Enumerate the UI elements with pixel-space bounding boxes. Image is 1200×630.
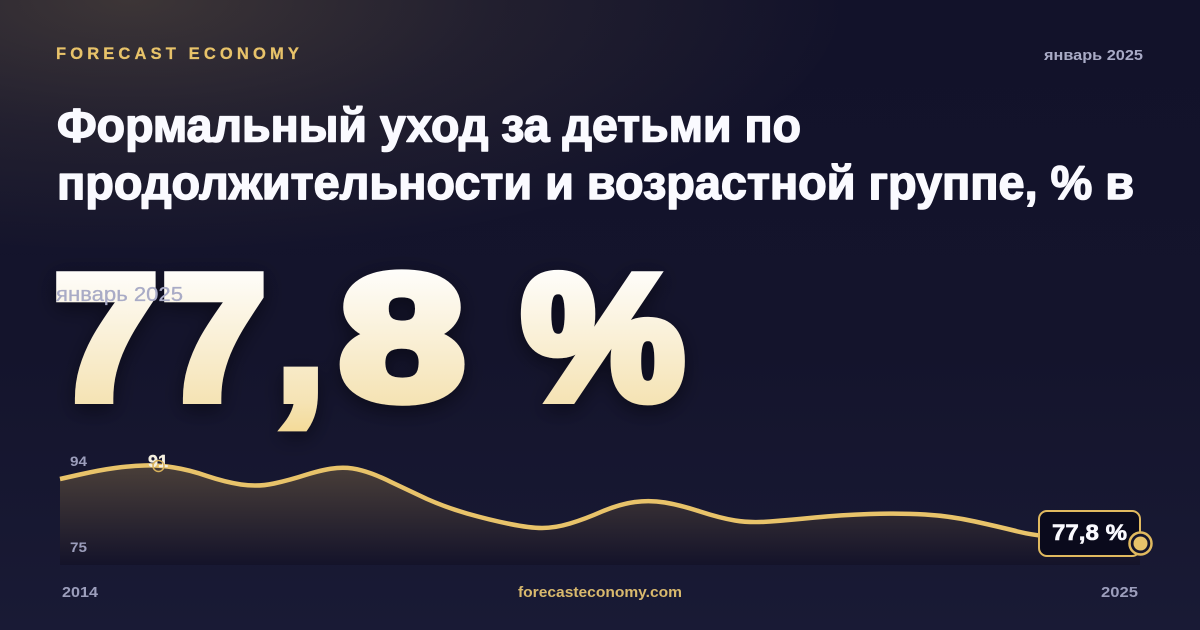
end marker	[1130, 532, 1152, 554]
peak marker	[153, 460, 164, 472]
peak label: 91	[148, 451, 168, 471]
big value: 8	[340, 238, 464, 436]
sparkline chart	[60, 451, 1152, 565]
title: продолжительности и возрастной группе, % в	[57, 156, 1134, 209]
big value: %	[522, 238, 684, 436]
end year: 2025	[1101, 584, 1138, 601]
end value callout: 77,8 %	[1052, 520, 1127, 545]
brand label: FORECAST ECONOMY	[56, 45, 303, 63]
title: Формальный уход за детьми по	[57, 98, 801, 152]
big value: 7	[162, 238, 266, 436]
big value	[54, 238, 684, 436]
area fill	[60, 465, 1140, 565]
big value: ,	[277, 238, 324, 436]
date label: январь 2025	[1044, 47, 1143, 64]
line	[60, 465, 1140, 543]
axis max label: 94	[70, 454, 88, 469]
big value: 7	[54, 238, 158, 436]
value date overlay: январь 2025	[56, 284, 183, 306]
title	[57, 98, 1134, 209]
end value callout	[1039, 511, 1140, 556]
axis min label: 75	[70, 540, 88, 555]
start year: 2014	[62, 584, 99, 601]
source url: forecasteconomy.com	[518, 584, 682, 601]
